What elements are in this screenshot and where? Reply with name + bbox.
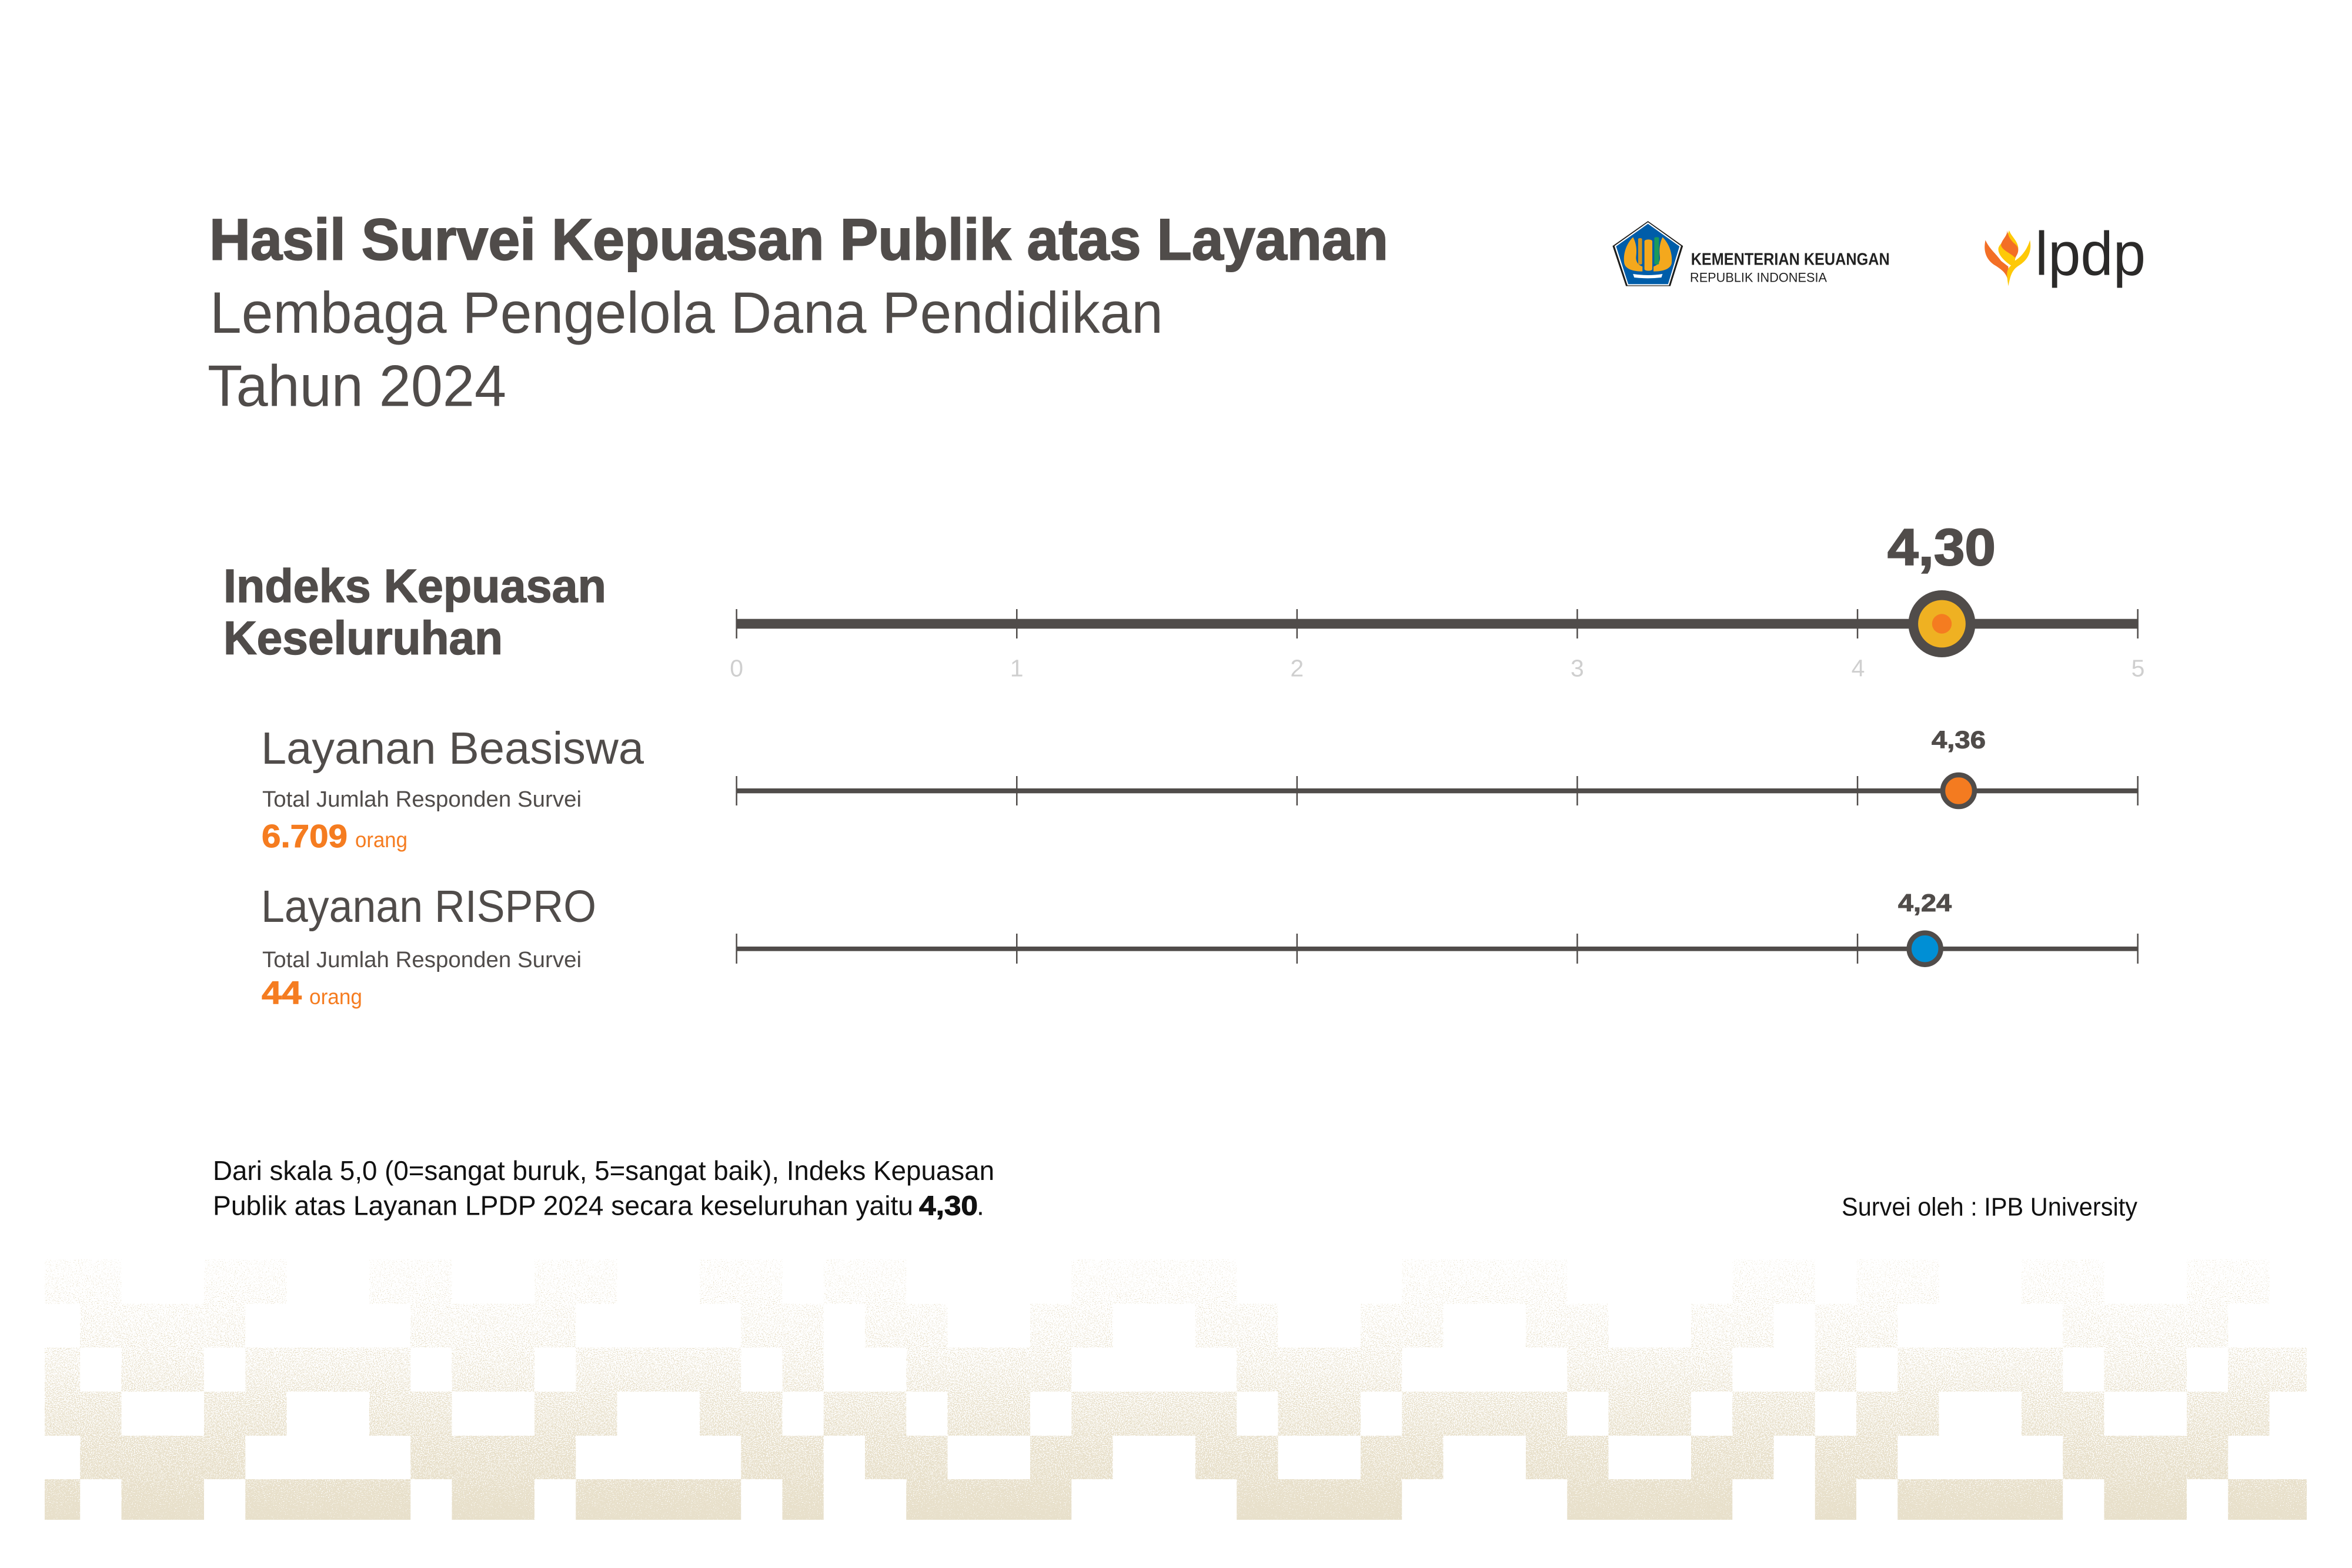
respondent count: 44 xyxy=(262,974,302,1011)
title line 3: Tahun 2024 xyxy=(208,353,506,419)
summary note: 4,30 xyxy=(919,1191,978,1221)
icon: LPDP flame xyxy=(1984,230,2030,286)
Kementerian Keuangan wordmark: KEMENTERIAN KEUANGAN xyxy=(1691,250,1890,269)
service name: Layanan Beasiswa xyxy=(261,723,644,774)
respondent unit: orang xyxy=(309,985,362,1009)
respondent count: 6.709 xyxy=(262,818,348,854)
marker: overall index 4,30 xyxy=(1909,590,1976,657)
summary note xyxy=(213,1155,994,1221)
axis line with ticks xyxy=(736,934,2139,964)
row: Layanan RISPRO xyxy=(261,881,2139,1011)
axis line with ticks xyxy=(736,609,2139,638)
marker: 4,36 xyxy=(1943,775,1975,807)
summary note: . xyxy=(977,1191,984,1221)
icon: Kemenkeu pentagon crest xyxy=(1612,221,1683,286)
marker: 4,24 xyxy=(1909,933,1941,965)
row: Indeks Kepuasan Keseluruhan xyxy=(223,518,2144,682)
axis scale labels: 0 xyxy=(730,655,743,682)
title block xyxy=(208,207,1388,419)
respondent caption: Total Jumlah Responden Survei xyxy=(262,948,582,972)
row heading: Keseluruhan xyxy=(223,612,503,664)
summary note: Publik atas Layanan LPDP 2024 secara keseluruhan yaitu xyxy=(213,1191,913,1221)
axis scale labels: 4 xyxy=(1852,655,1865,682)
title line 1: Hasil Survei Kepuasan Publik atas Layanan xyxy=(209,207,1388,272)
axis scale labels: 1 xyxy=(1010,655,1024,682)
title line 2: Lembaga Pengelola Dana Pendidikan xyxy=(210,280,1163,345)
lpdp wordmark: lpdp xyxy=(2035,220,2146,289)
logo: LPDP xyxy=(1984,220,2146,289)
row heading xyxy=(223,560,606,664)
axis scale labels: 2 xyxy=(1290,655,1304,682)
value 4,30: 4,30 xyxy=(1887,518,1996,576)
row heading: Indeks Kepuasan xyxy=(223,560,606,612)
axis scale labels xyxy=(730,655,2144,682)
axis scale labels: 3 xyxy=(1571,655,1584,682)
summary note: Dari skala 5,0 (0=sangat buruk, 5=sangat baik), Indeks Kepuasan xyxy=(213,1155,994,1186)
decorative woven pattern band xyxy=(45,1259,2307,1520)
row: Layanan Beasiswa xyxy=(261,723,2139,854)
service name: Layanan RISPRO xyxy=(261,881,596,932)
respondent unit: orang xyxy=(355,828,407,852)
respondent caption: Total Jumlah Responden Survei xyxy=(262,787,582,812)
axis scale labels: 5 xyxy=(2132,655,2144,682)
logo: Kementerian Keuangan xyxy=(1612,221,1890,286)
survey credit: Survei oleh : IPB University xyxy=(1842,1193,2137,1222)
Republik Indonesia wordmark: REPUBLIK INDONESIA xyxy=(1690,270,1827,285)
axis line with ticks xyxy=(736,776,2139,805)
value 4,24: 4,24 xyxy=(1898,889,1952,917)
value 4,36: 4,36 xyxy=(1932,726,1986,754)
